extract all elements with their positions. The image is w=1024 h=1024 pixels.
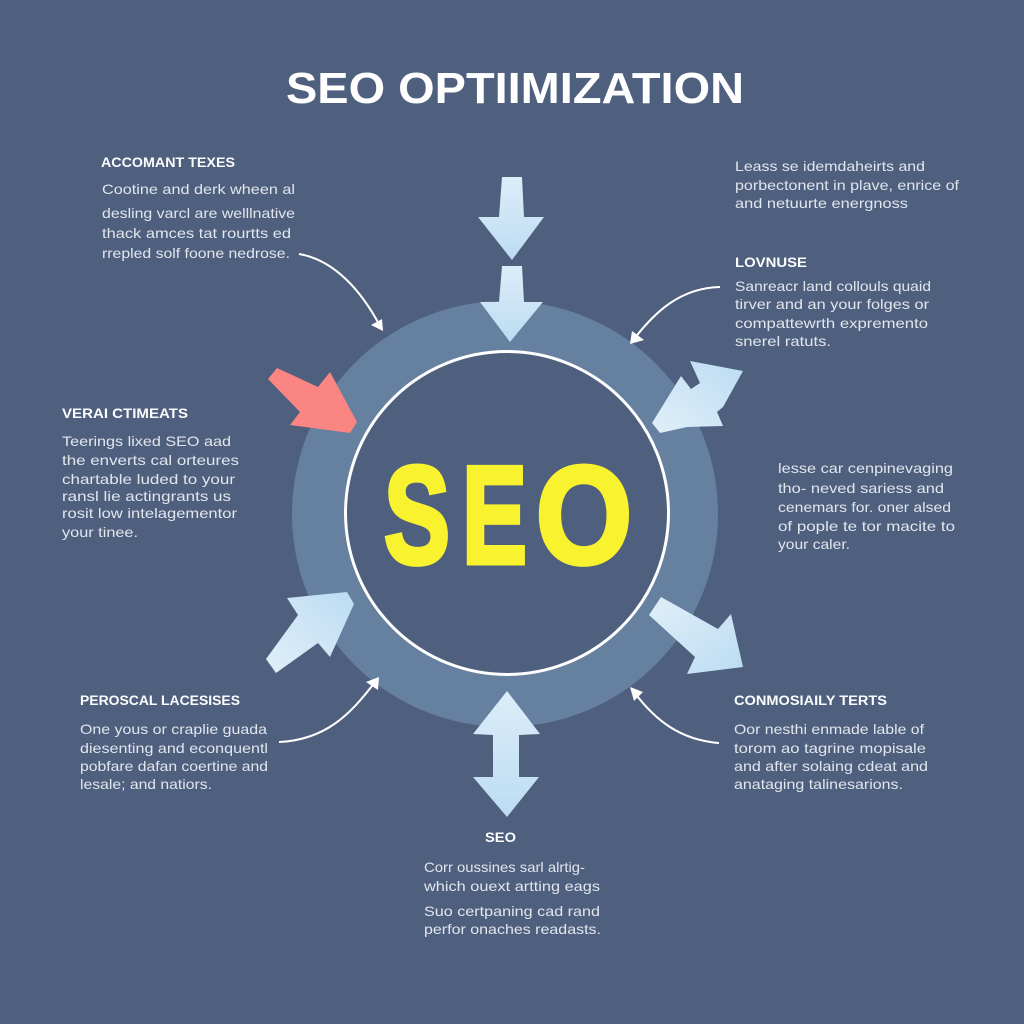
- text block: top left: [101, 155, 295, 261]
- text block: bottom left: One yous or craplie guada: [80, 721, 267, 737]
- text block: middle left: [62, 406, 239, 540]
- text block: middle right: cenemars for. oner alsed: [778, 499, 951, 515]
- text block: bottom right: torom ao tagrine mopisale: [734, 740, 926, 756]
- center label: SEO: [384, 438, 632, 593]
- text block: top right: [735, 158, 959, 211]
- text block: bottom right: [734, 693, 928, 792]
- text block: top left: thack amces tat rourtts ed: [102, 225, 291, 241]
- text block: middle right: your caler.: [778, 536, 850, 552]
- text block: top left: Cootine and derk wheen al: [102, 181, 295, 197]
- text block: upper right, Lovnuse: LOVNUSE: [735, 255, 807, 270]
- text block: top right: porbectonent in plave, enrice of: [735, 177, 959, 193]
- text block: middle left: the enverts cal orteures: [62, 452, 239, 468]
- arrow: upper right: [652, 361, 743, 433]
- text block: bottom right: CONMOSIAILY TERTS: [734, 693, 887, 708]
- text block: middle left: ransl lie actingrants us: [62, 488, 231, 504]
- text block: bottom left: pobfare dafan coertine and: [80, 758, 268, 774]
- arrow: red upper left: [268, 368, 357, 433]
- connector arrow: top right: [630, 287, 720, 344]
- text block: top right: and netuurte energnoss: [735, 195, 908, 211]
- text block: bottom center: which ouext artting eags: [423, 878, 600, 894]
- text block: bottom right: anataging talinesarions.: [734, 776, 903, 792]
- text block: bottom center: [423, 830, 601, 937]
- text block: bottom center: SEO: [485, 830, 516, 845]
- text block: middle right: tho- neved sariess and: [778, 480, 944, 496]
- text block: bottom right: and after solaing cdeat and: [734, 758, 928, 774]
- text block: bottom left: lesale; and natiors.: [80, 776, 212, 792]
- text block: bottom right: Oor nesthi enmade lable of: [734, 721, 924, 737]
- text block: middle left: VERAI CTIMEATS: [62, 406, 188, 421]
- arrow: top outer: [478, 177, 544, 260]
- text block: top right: Leass se idemdaheirts and: [735, 158, 925, 174]
- text block: bottom left: PEROSCAL LACESISES: [80, 693, 240, 708]
- text block: top left: rrepled solf foone nedrose.: [102, 245, 290, 261]
- center label: SEO: S: [384, 438, 450, 593]
- text block: upper right, Lovnuse: snerel ratuts.: [735, 333, 831, 349]
- text block: middle right: of pople te tor macite to: [778, 518, 955, 534]
- arrow: lower right: [649, 597, 743, 674]
- diagram: central SEO ring: [318, 327, 692, 701]
- center label: SEO: E: [462, 438, 527, 593]
- text block: bottom left: diesenting and econquentl: [80, 740, 268, 756]
- text block: top left: desling varcl are welllnative: [102, 205, 295, 221]
- arrow: top inner: [480, 266, 543, 342]
- text block: middle right: [778, 460, 955, 552]
- text block: middle left: Teerings lixed SEO aad: [62, 433, 231, 449]
- text block: bottom center: Corr oussines sarl alrtig-: [424, 859, 585, 875]
- text block: upper right, Lovnuse: [735, 255, 931, 349]
- outer ring: [318, 327, 692, 701]
- connector arrow: bottom right: [630, 687, 719, 743]
- text block: top left: ACCOMANT TEXES: [101, 155, 235, 170]
- connector arrow: top left: [299, 254, 383, 331]
- connector arrow: bottom left: [279, 677, 379, 742]
- text block: bottom center: perfor onaches readasts.: [424, 921, 601, 937]
- text block: bottom center: Suo certpaning cad rand: [424, 903, 600, 919]
- text block: middle left: rosit low intelagementor: [62, 505, 237, 521]
- text block: middle right: lesse car cenpinevaging: [778, 460, 953, 476]
- text block: middle left: your tinee.: [62, 524, 138, 540]
- text block: upper right, Lovnuse: compattewrth expremento: [735, 315, 928, 331]
- arrow: bottom double-headed: [473, 691, 540, 817]
- arrow: lower left: [266, 592, 354, 673]
- title: SEO OPTIIMIZATION: [286, 64, 744, 113]
- text block: middle left: chartable luded to your: [62, 471, 235, 487]
- text block: upper right, Lovnuse: tirver and an your folges or: [735, 296, 929, 312]
- text block: bottom left: [80, 693, 268, 792]
- center label: SEO: O: [536, 438, 632, 593]
- text block: upper right, Lovnuse: Sanreacr land collouls quaid: [735, 278, 931, 294]
- inner circle outline: [346, 352, 668, 674]
